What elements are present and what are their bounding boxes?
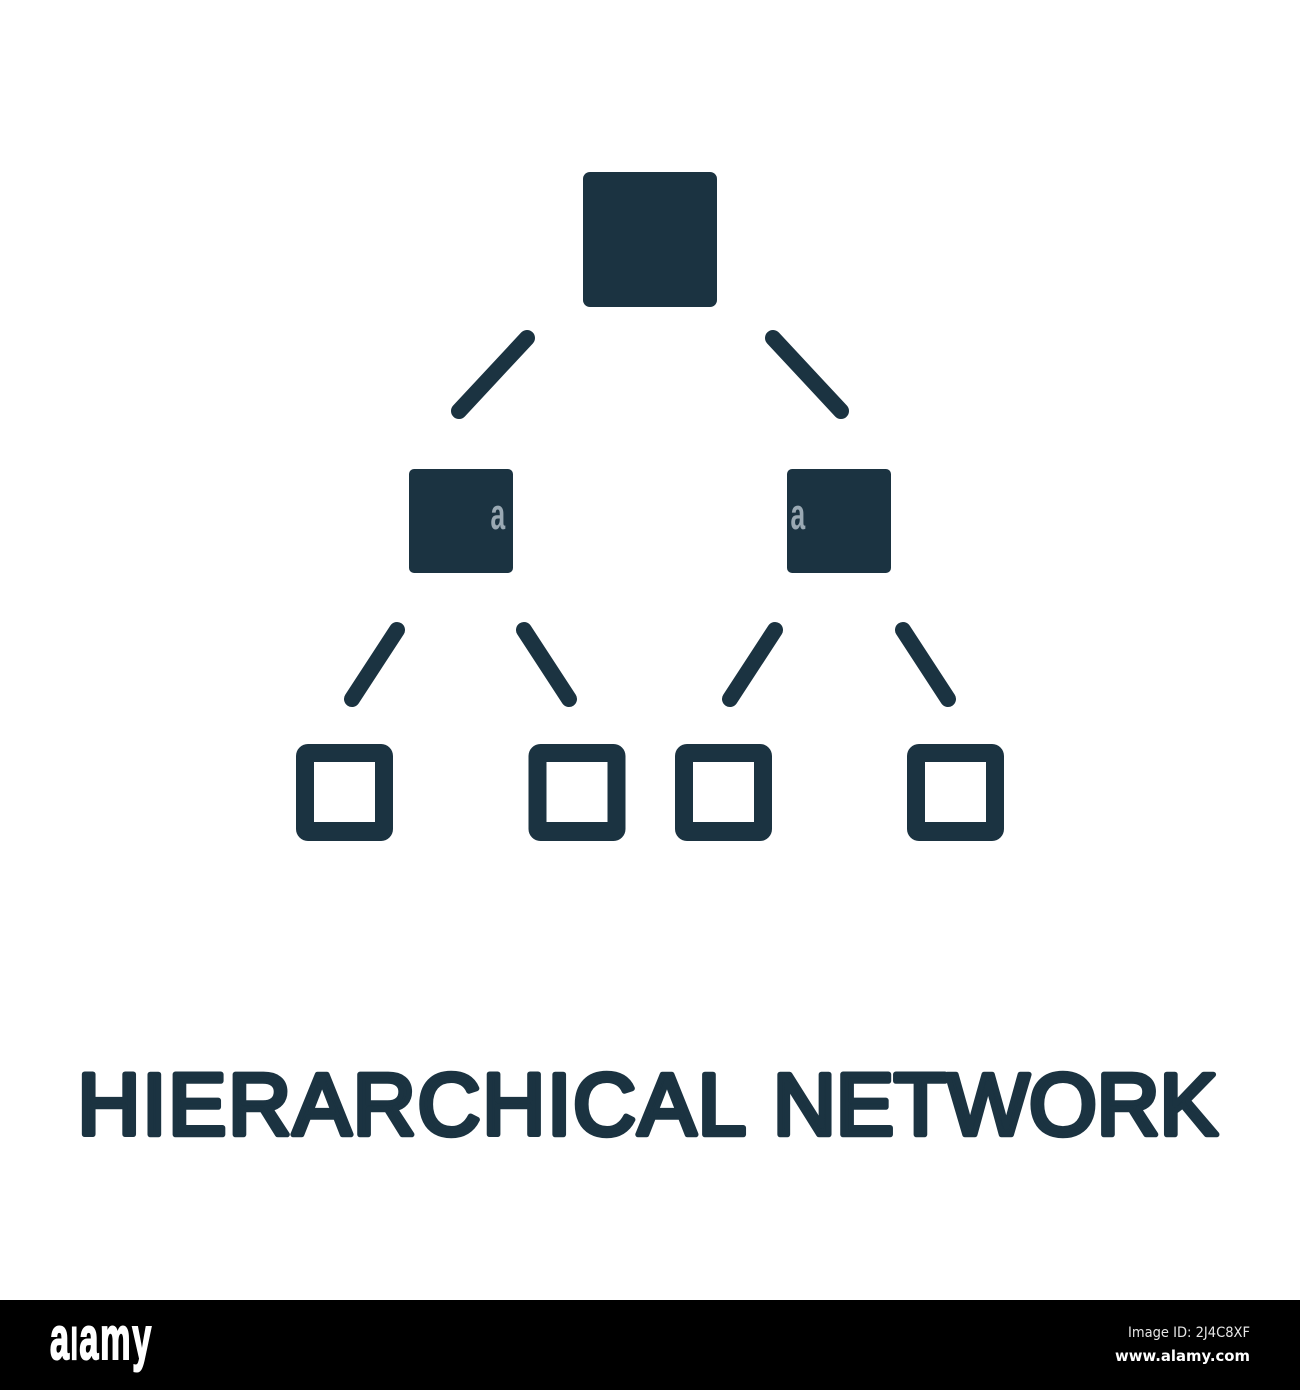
connectors: root to second level [459, 338, 841, 411]
node: second level left square [409, 469, 513, 573]
watermark letter right: a [790, 489, 806, 539]
footer bar [0, 1300, 1300, 1390]
footer logo: alamy [50, 1306, 153, 1373]
connectors: second level to leaves [352, 630, 948, 699]
node: top root square [583, 172, 717, 307]
image id: Image ID: 2J4C8XF [1128, 1325, 1250, 1341]
watermark letter left: a [490, 489, 506, 539]
website url: www.alamy.com [1115, 1347, 1250, 1365]
title: NETWORK [773, 1056, 1218, 1154]
node: second level right square [787, 469, 891, 573]
icon: hierarchical network tree [296, 172, 1004, 841]
leaf nodes: four outlined squares [296, 744, 1004, 841]
title: HIERARCHICAL [78, 1056, 748, 1154]
